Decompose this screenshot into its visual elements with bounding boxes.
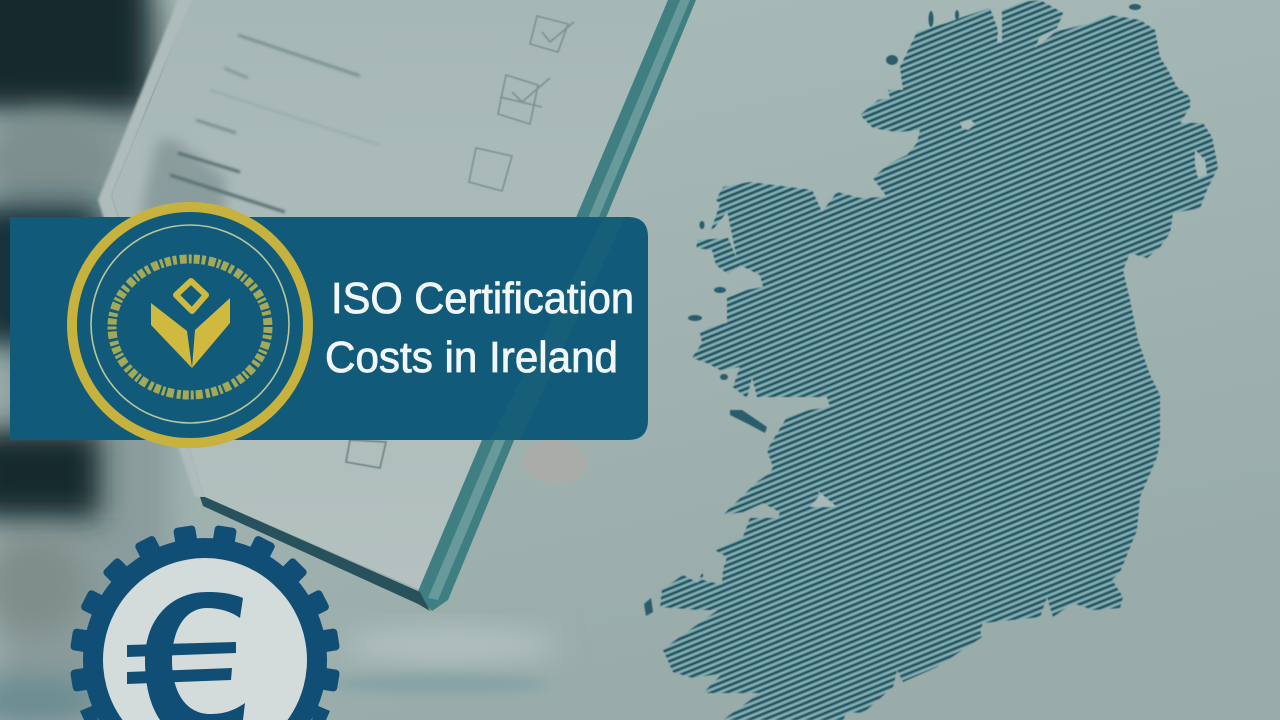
title banner (10, 217, 648, 440)
seal right leaf (192, 298, 230, 368)
Ireland inland loughs (810, 120, 1207, 507)
tablet left frame (98, 0, 205, 497)
map of Ireland (644, 0, 1218, 720)
title text (325, 274, 634, 382)
tablet right frame (416, 0, 696, 611)
gear teeth (70, 525, 340, 720)
tablet frame seen through banner (490, 217, 625, 440)
checkbox 1 (530, 16, 574, 52)
title text: ISO Certification (331, 274, 634, 323)
euro gear icon (70, 525, 340, 720)
Ireland coast islands (644, 4, 1141, 616)
finger shadow (523, 440, 587, 484)
Ireland Achill peninsula (696, 195, 740, 274)
checkbox 4 (346, 440, 386, 468)
coin face (103, 558, 307, 720)
title text: Costs in Ireland (325, 333, 618, 382)
tablet screen (112, 0, 668, 590)
checkbox 3 (469, 148, 512, 191)
Ireland landmass (660, 0, 1218, 720)
checkbox 2 (498, 75, 550, 124)
seal left leaf (151, 303, 192, 368)
gear ring (83, 538, 327, 720)
hand shadow on screen (140, 140, 225, 215)
seal diamond emblem (176, 281, 206, 311)
seal ring lettering (112, 259, 268, 395)
blurred checklist lines (170, 35, 380, 212)
tablet bottom edge (200, 497, 430, 611)
certification seal (72, 207, 308, 443)
tablet with checklist (98, 0, 696, 611)
euro symbol (127, 592, 245, 720)
